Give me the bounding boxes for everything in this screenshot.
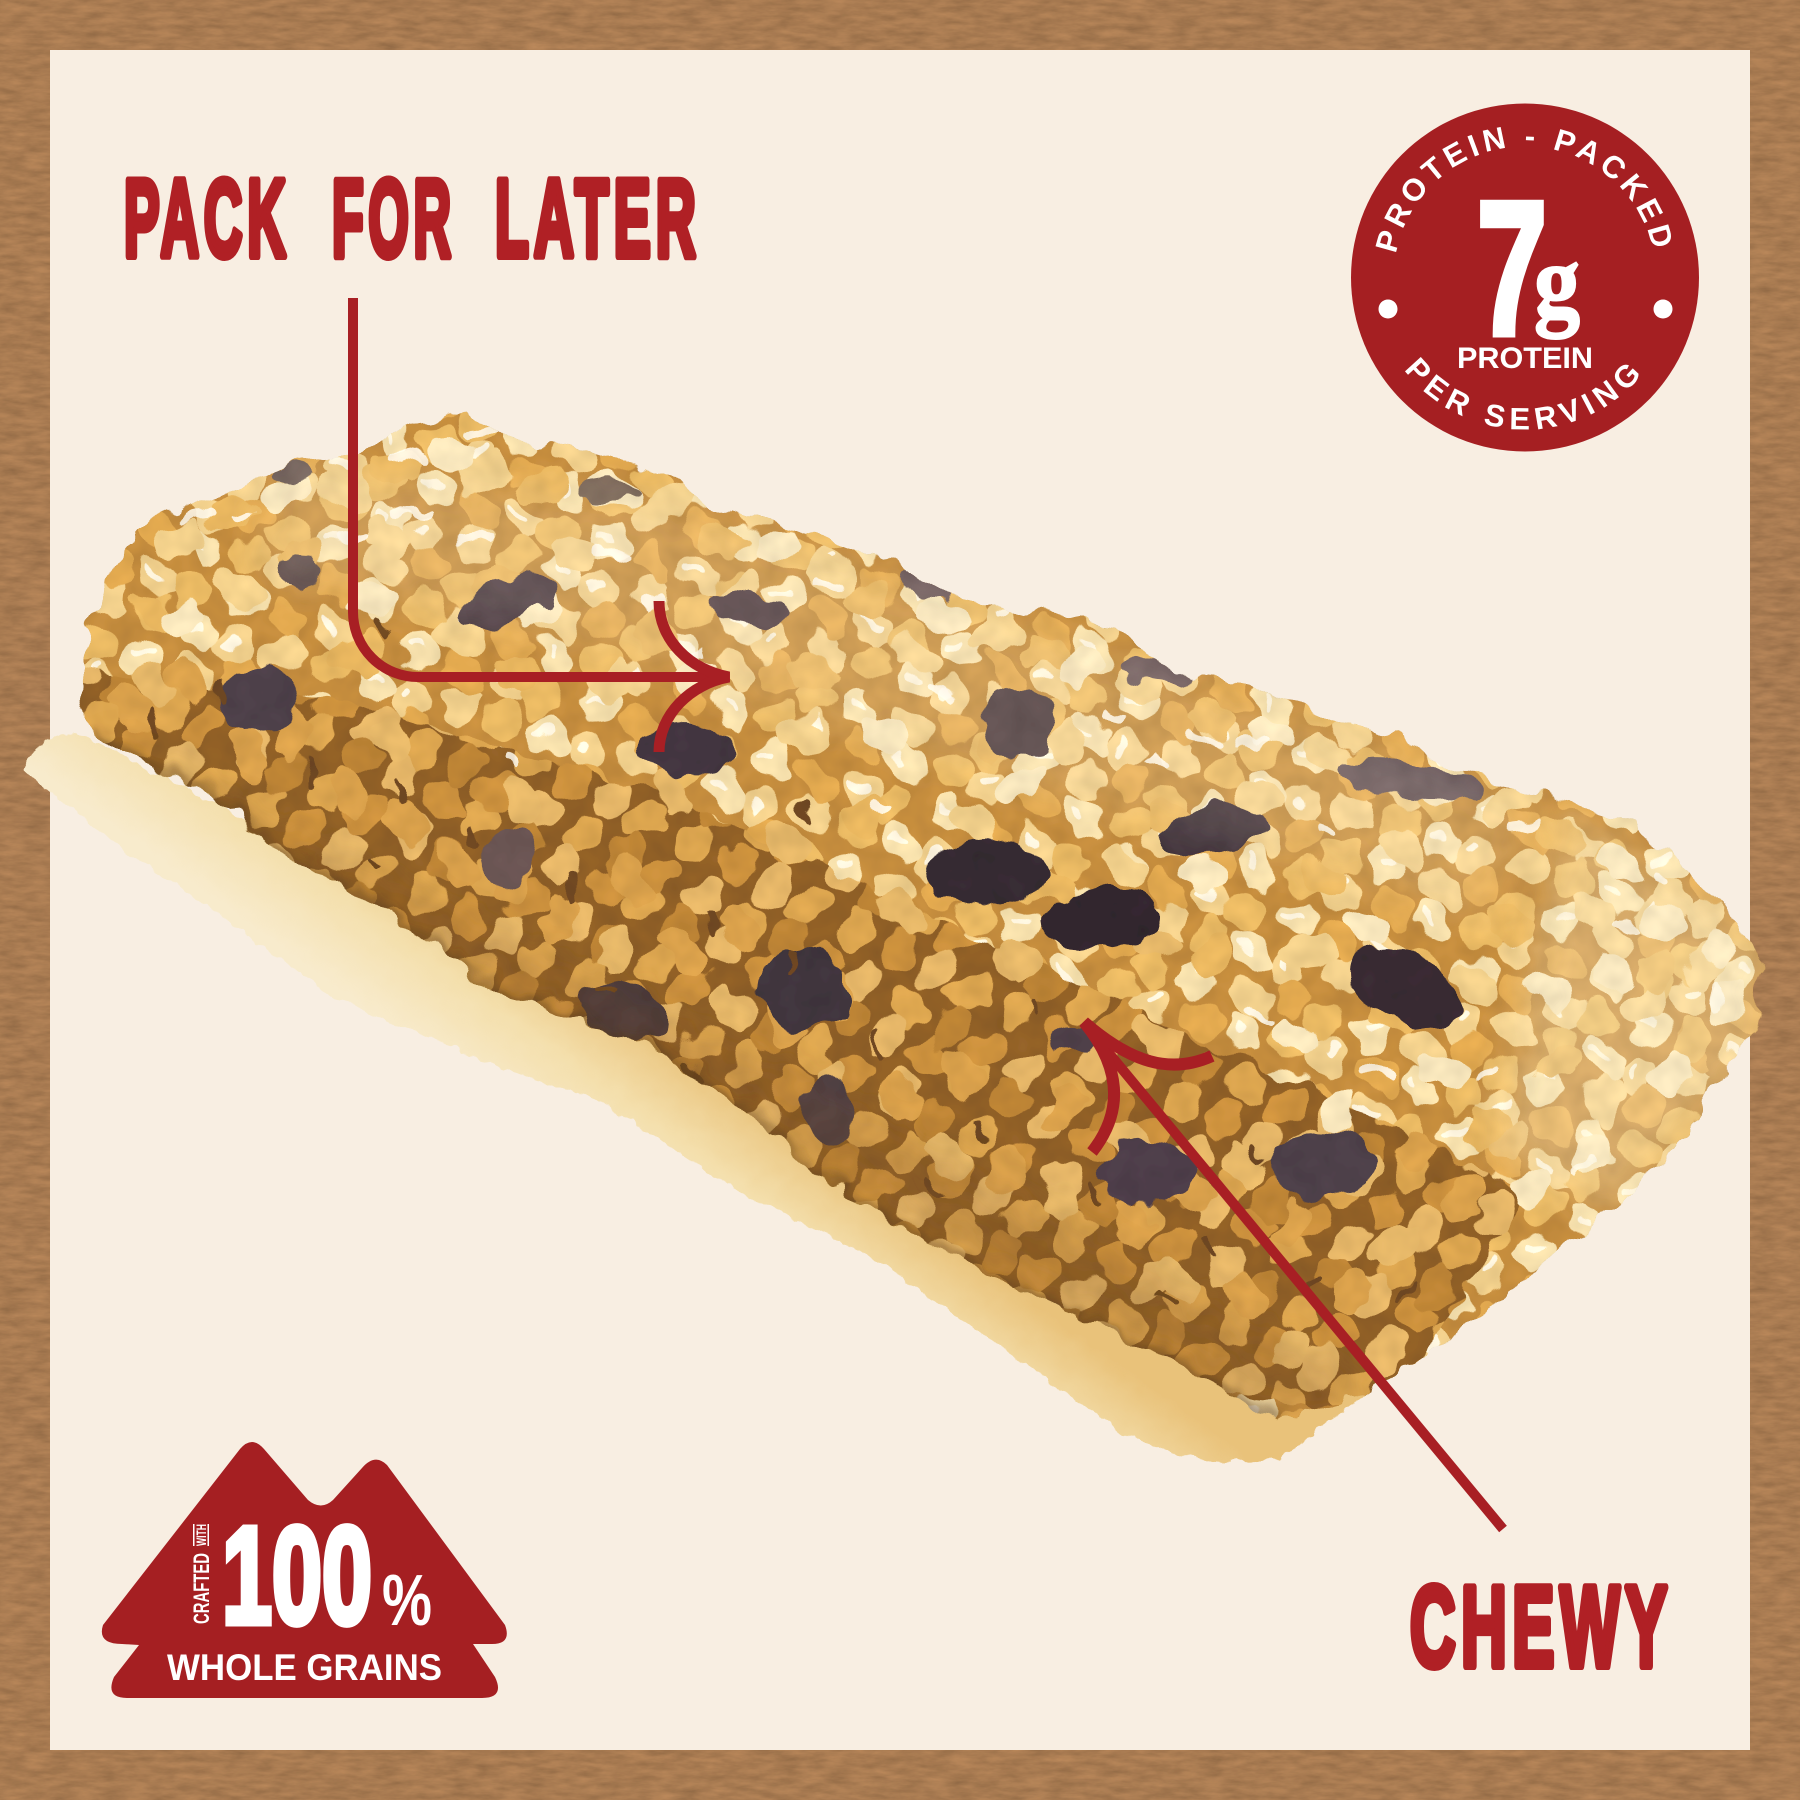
chocolate chips: [219, 464, 1479, 1205]
badge: crafted with 100% whole grains: WITH: [193, 1524, 209, 1546]
badge: 7g protein per serving: 7: [1477, 163, 1547, 375]
badge: 7g protein per serving: PER SERVING: [1405, 357, 1638, 430]
arrow: from chewy label to bar: [1084, 1022, 1503, 1529]
badge: crafted with 100% whole grains: WHOLE GRAINS: [167, 1647, 442, 1688]
badge: 7g protein per serving: [1351, 104, 1699, 452]
badge: crafted with 100% whole grains: [102, 1442, 507, 1698]
badge: 7g protein per serving: PROTEIN - PACKED: [1376, 127, 1671, 252]
heading: PACK FOR LATER: [124, 157, 701, 280]
illustration: watercolor granola bar: [23, 390, 1791, 1462]
badge: 7g protein per serving: PROTEIN: [1457, 342, 1593, 375]
heading: CHEWY: CHEWY: [1410, 1563, 1673, 1691]
bar body with oat flakes: [46, 390, 1791, 1446]
heading: PACK FOR LATER: LATER: [495, 157, 701, 280]
heading: PACK FOR LATER: FOR: [332, 158, 456, 280]
arrow: from heading to top of bar: [353, 298, 729, 752]
badge: crafted with 100% whole grains: 100: [222, 1499, 372, 1653]
badge: 7g protein per serving: g: [1534, 224, 1580, 339]
badge: crafted with 100% whole grains: %: [382, 1561, 432, 1641]
body shading: [256, 816, 1350, 1418]
badge: crafted with 100% whole grains: CRAFTED: [189, 1553, 214, 1624]
flake highlights and crevices: [184, 429, 1722, 1171]
heading: PACK FOR LATER: PACK: [124, 158, 291, 280]
wrapper sheet under the bar: [23, 731, 1366, 1462]
